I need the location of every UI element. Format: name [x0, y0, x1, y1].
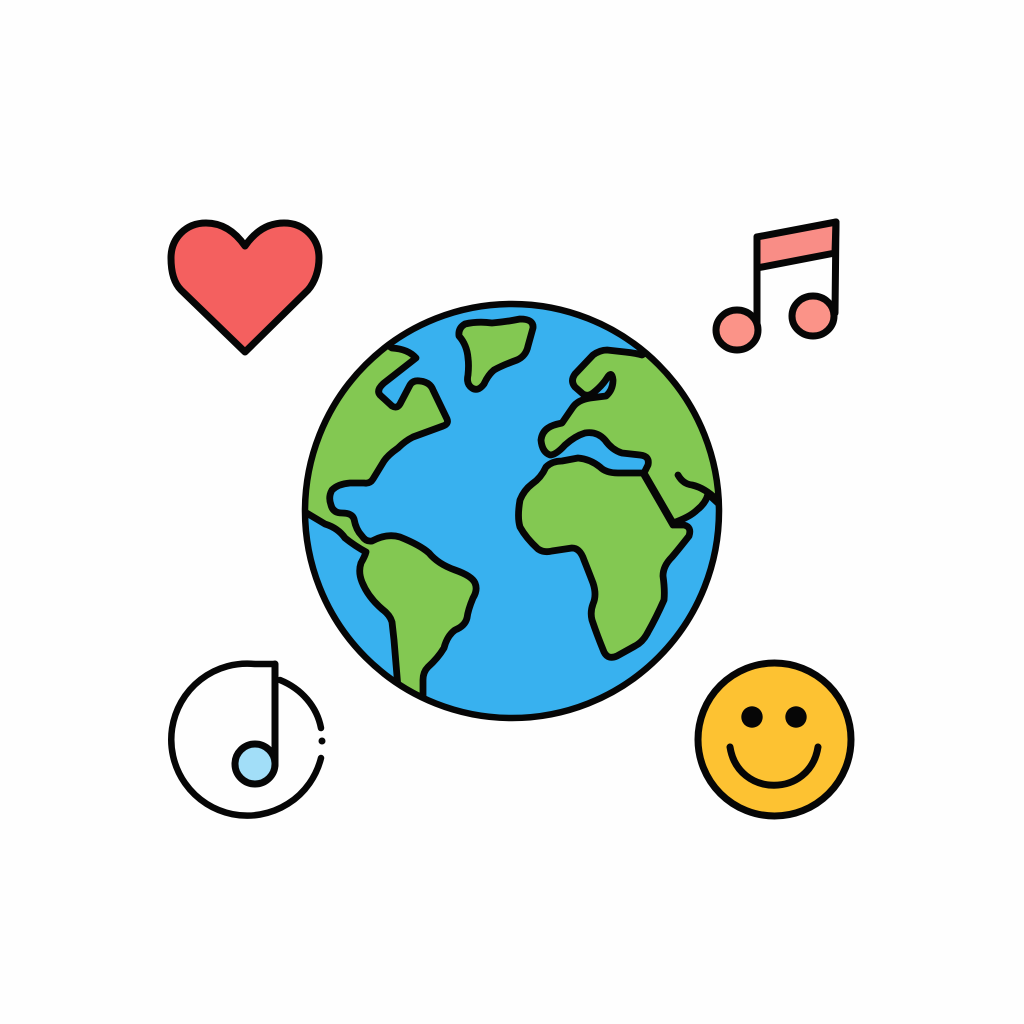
Greenland landmass	[459, 319, 533, 389]
the Americas landmass	[308, 344, 480, 696]
illustration: globe with icons	[168, 218, 854, 820]
icon: beamed music notes	[716, 222, 836, 350]
Europe and Asia landmass	[541, 350, 740, 523]
icon: heart	[171, 223, 319, 352]
icon: globe	[285, 304, 740, 718]
Africa landmass	[518, 458, 690, 657]
icon: smiley face	[698, 663, 851, 816]
Arabian coast line	[678, 475, 717, 500]
icon: circular music disc	[171, 664, 326, 816]
